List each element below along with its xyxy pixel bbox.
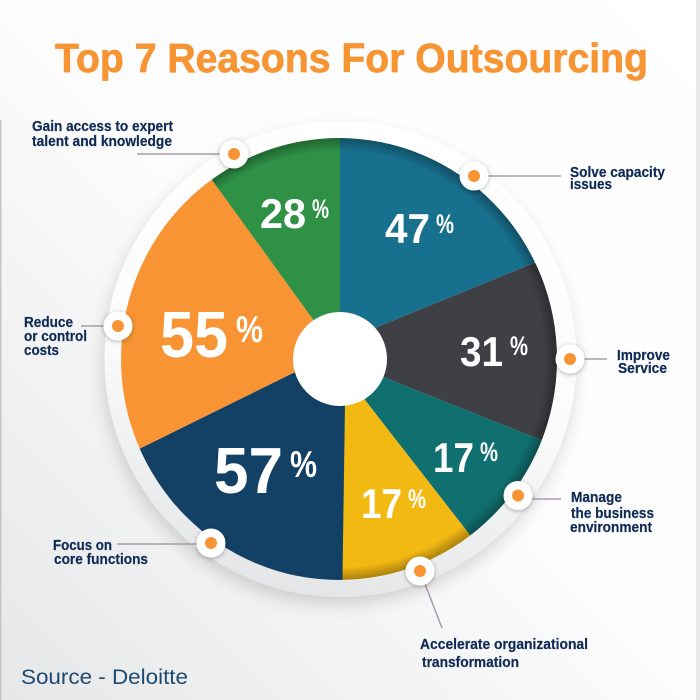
callout: Reduce costs <box>24 312 132 359</box>
value: 47%: 47 <box>385 205 430 252</box>
callout: Focus on core functions <box>53 528 226 568</box>
value: 28%: 28 <box>260 190 306 237</box>
value: 17% teal: % <box>480 437 498 467</box>
callout: Focus on core functions: Focus on <box>53 538 112 554</box>
value: 17% yellow: % <box>408 484 426 514</box>
value: 57%: 57 <box>214 434 283 507</box>
source note: Source - Deloitte <box>21 666 188 689</box>
callout: Manage environment: environment <box>570 520 652 536</box>
callout: Manage environment <box>504 481 654 536</box>
value: 55%: % <box>236 309 263 350</box>
callout: Improve Service <box>556 344 670 377</box>
callout: Gain access: talent and knowledge <box>32 134 172 150</box>
callout: Focus on core functions: core functions <box>54 552 148 568</box>
callout: Reduce costs: Reduce <box>24 315 73 331</box>
panel: pie chart <box>96 138 580 611</box>
value: 55%: 55 <box>160 298 228 371</box>
value: 47%: % <box>436 209 454 239</box>
callout: Manage environment: Manage <box>571 490 622 506</box>
center hole <box>293 312 387 406</box>
callout: Solve capacity: issues <box>570 177 612 193</box>
value: 57%: % <box>290 444 317 485</box>
outer ring <box>104 121 576 597</box>
callout: Accelerate transformation: Accelerate organizational <box>420 637 588 653</box>
callout: Manage environment: the business <box>571 506 654 522</box>
pie slices <box>121 138 557 580</box>
value: 31%: 31 <box>460 328 503 375</box>
value: 17% yellow: 17 <box>361 480 402 527</box>
title: Top 7 Reasons For Outsourcing <box>55 35 648 81</box>
callout: Reduce costs: costs <box>24 343 59 359</box>
value: 28% <box>260 190 329 237</box>
callout: Solve capacity <box>460 162 665 193</box>
callout: Reduce costs: or control <box>24 329 87 345</box>
value: 47% <box>385 205 454 252</box>
callout: Improve Service: Improve <box>617 348 670 364</box>
value: 31% <box>460 328 528 375</box>
callout: Solve capacity: Solve capacity <box>570 165 665 181</box>
value: 28%: % <box>312 194 329 224</box>
value: 31%: % <box>510 331 528 361</box>
value: 17% teal: 17 <box>433 434 474 481</box>
callout: Accelerate transformation <box>406 556 588 671</box>
callout: Improve Service: Service <box>618 361 667 377</box>
callout: Gain access: Gain access to expert <box>32 119 173 135</box>
callout: Accelerate transformation: transformation <box>422 655 519 671</box>
callout: Gain access <box>32 119 248 168</box>
